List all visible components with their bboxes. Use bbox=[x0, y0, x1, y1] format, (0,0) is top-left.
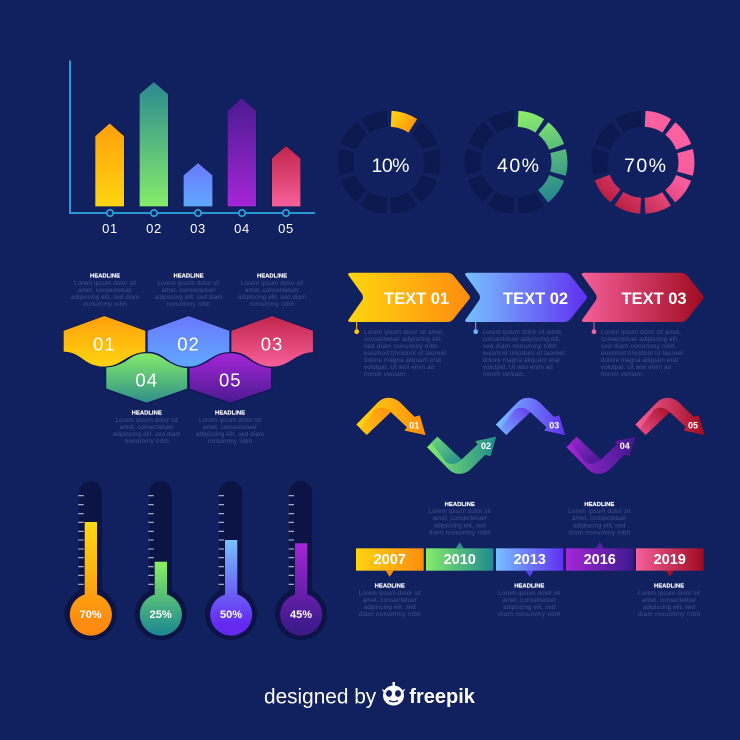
hexagon text: 04: HEADLINE bbox=[132, 410, 162, 416]
donut chart: 40% bbox=[472, 119, 560, 206]
timeline bbox=[356, 502, 704, 618]
bar 04 bbox=[227, 98, 256, 207]
hexagon text: 02: Lorem ipsum dolor sit bbox=[158, 280, 220, 287]
thermometer: 45% bbox=[275, 481, 327, 640]
hexagon text: 02: HEADLINE bbox=[173, 273, 204, 279]
chevron banner: text 02: minim veniam, bbox=[483, 371, 526, 378]
hexagon 04: 04 bbox=[135, 369, 158, 390]
bar 02 bbox=[139, 82, 168, 207]
footer credit bbox=[264, 682, 476, 708]
timeline note: above 2010: diam nonummy nibh bbox=[429, 529, 491, 536]
arrow 02 bbox=[427, 436, 497, 474]
hexagon text: 03: HEADLINE bbox=[257, 273, 287, 279]
timeline note: below 2013 bbox=[498, 583, 561, 618]
chevron banner: text 02: consectetuer adipiscing elit, bbox=[483, 336, 561, 343]
hexagon text: 02: nonummy nibh bbox=[166, 301, 211, 308]
timeline note: below 2019: adipiscing elit, sed bbox=[643, 604, 696, 611]
timeline note: below 2013: HEADLINE bbox=[514, 583, 544, 589]
hexagon text: 05: adipiscing elit, sed diam bbox=[196, 431, 264, 438]
hexagon text: 01: HEADLINE bbox=[90, 273, 120, 279]
footer credit: designed by bbox=[264, 685, 377, 708]
hexagon text: 02 bbox=[154, 273, 222, 308]
timeline note: above 2016: HEADLINE bbox=[584, 502, 614, 508]
timeline note: below 2007: adipiscing elit, sed bbox=[364, 604, 416, 611]
hexagon 04 bbox=[106, 353, 188, 403]
chevron banner: text 01 bbox=[348, 273, 470, 378]
timeline note: above 2016: diam nonummy nibh bbox=[568, 529, 631, 536]
hexagon text: 04: adipiscing elit, sed diam bbox=[113, 431, 181, 438]
chevron banner: text 03: Lorem ipsum dolor sit amet, bbox=[601, 329, 681, 336]
chevron banner: text 03: dolore magna aliquam erat bbox=[601, 357, 678, 364]
hexagon 02 bbox=[147, 316, 230, 367]
chevron banner: text 03: minim veniam, bbox=[601, 371, 644, 378]
wave arrows bbox=[356, 398, 705, 474]
hexagon text: 05 bbox=[196, 410, 264, 445]
chevron banner: text 03: TEXT 03 bbox=[622, 290, 687, 308]
chevron banner: text 01: sed diam nonummy nibh bbox=[364, 343, 438, 350]
chevron banner: text 01: minim veniam, bbox=[364, 371, 407, 378]
hexagon text: 02: amet, consectetuer bbox=[162, 287, 216, 294]
donut chart: 70%: 70% bbox=[624, 155, 666, 177]
chevron banner: text 02: TEXT 02 bbox=[503, 290, 568, 308]
hexagon 03: 03 bbox=[261, 334, 283, 355]
timeline block: 2007 bbox=[356, 548, 424, 577]
hexagon text: 01: nonummy nibh bbox=[83, 301, 128, 308]
timeline note: below 2013: diam nonummy nibh bbox=[498, 611, 561, 618]
timeline note: above 2016: Lorem ipsum dolor sit bbox=[568, 508, 631, 515]
timeline note: above 2010: HEADLINE bbox=[445, 502, 475, 508]
timeline block: 2019: 2019 bbox=[654, 552, 686, 568]
hexagon 01: 01 bbox=[93, 334, 116, 355]
hexagon text: 01: adipiscing elit, sed diam bbox=[71, 294, 139, 301]
timeline block: 2007: 2007 bbox=[374, 552, 406, 568]
chevron banner: text 03: volutpat. Ut wisi enim ad bbox=[601, 364, 672, 371]
axis labels: 01 bbox=[102, 221, 118, 236]
arrow 01: 01 bbox=[409, 420, 419, 430]
arrow 04 bbox=[566, 436, 636, 474]
timeline block: 2013 bbox=[496, 548, 563, 577]
bar 05 bbox=[272, 146, 301, 207]
donut chart: 70% bbox=[600, 119, 686, 206]
timeline block: 2016: 2016 bbox=[584, 552, 616, 568]
axis labels bbox=[102, 221, 294, 236]
axis labels: 03 bbox=[190, 221, 206, 236]
timeline note: below 2007: amet, consectetuer bbox=[363, 597, 417, 604]
hexagon text: 05: amet, consectetuer bbox=[203, 424, 257, 431]
chevron banner: text 03: sed diam nonummy nibh bbox=[601, 343, 675, 350]
thermometer: 50%: 50% bbox=[220, 609, 242, 621]
timeline note: below 2007: Lorem ipsum dolor sit bbox=[359, 590, 421, 597]
hexagon text: 01: amet, consectetuer bbox=[78, 287, 132, 294]
hexagon text: 03: nonummy nibh bbox=[250, 301, 295, 308]
hexagon text: 04: nonummy nibh bbox=[125, 438, 169, 445]
bar chart bbox=[70, 60, 315, 236]
timeline note: below 2013: amet, consectetuer bbox=[502, 597, 556, 604]
axis labels: 05 bbox=[278, 221, 294, 236]
icon: freepik mascot bbox=[382, 682, 405, 706]
chart axes bbox=[70, 60, 315, 213]
timeline note: below 2019: HEADLINE bbox=[654, 583, 684, 589]
timeline note: below 2019: diam nonummy nibh bbox=[638, 611, 701, 618]
hexagon infographic bbox=[63, 273, 313, 445]
chevron banner: text 01: euismod tincidunt ut laoreet bbox=[364, 350, 446, 357]
donut chart: 10% bbox=[346, 119, 432, 206]
axis labels: 04 bbox=[234, 221, 250, 236]
arrow 03 bbox=[496, 398, 566, 436]
chevron banner: text 01: TEXT 01 bbox=[384, 290, 449, 308]
timeline block: 2010 bbox=[426, 542, 493, 571]
hexagon 05: 05 bbox=[219, 369, 242, 390]
thermometer: 45%: 45% bbox=[290, 609, 312, 621]
timeline note: above 2010 bbox=[429, 502, 491, 536]
timeline block: 2013: 2013 bbox=[514, 552, 546, 568]
bar 01 bbox=[95, 123, 124, 207]
chevron banner: text 02: dolore magna aliquam erat bbox=[483, 357, 560, 364]
arrow 01 bbox=[356, 398, 426, 436]
hexagon 02: 02 bbox=[177, 334, 200, 355]
timeline note: above 2010: Lorem ipsum dolor sit bbox=[429, 508, 491, 515]
chevron banner: text 01: volutpat. Ut wisi enim ad bbox=[364, 364, 435, 371]
donut chart: 40%: 40% bbox=[497, 155, 539, 177]
timeline note: below 2019 bbox=[638, 583, 701, 618]
timeline block: 2019 bbox=[636, 548, 704, 577]
thermometer: 70% bbox=[65, 481, 117, 640]
chevron banner: text 02: sed diam nonummy nibh bbox=[483, 343, 557, 350]
hexagon text: 01: Lorem ipsum dolor sit bbox=[74, 280, 136, 287]
thermometer: 25% bbox=[135, 481, 187, 640]
hexagon text: 05: Lorem ipsum dolor sit bbox=[199, 417, 261, 424]
chevron banner: text 03: consectetuer adipiscing elit, bbox=[601, 336, 679, 343]
timeline note: below 2007: diam nonummy nibh bbox=[359, 611, 421, 618]
timeline block: 2010: 2010 bbox=[444, 552, 476, 568]
thermometer: 25%: 25% bbox=[150, 609, 172, 621]
donut chart: 10%: 10% bbox=[372, 155, 410, 177]
arrow 02: 02 bbox=[481, 441, 491, 451]
chevron banner: text 01: dolore magna aliquam erat bbox=[364, 357, 441, 364]
timeline note: below 2013: Lorem ipsum dolor sit bbox=[498, 590, 561, 597]
timeline block: 2016 bbox=[566, 542, 633, 571]
hexagon 01 bbox=[63, 316, 146, 367]
footer credit: freepik bbox=[409, 686, 476, 708]
chevron banner: text 02: Lorem ipsum dolor sit amet, bbox=[483, 329, 563, 336]
thermometer: 50% bbox=[205, 481, 257, 640]
hexagon text: 04: amet, consectetuer bbox=[120, 424, 174, 431]
timeline note: above 2016: adipiscing elit, sed bbox=[573, 522, 626, 529]
hexagon text: 02: adipiscing elit, sed diam bbox=[154, 294, 222, 301]
hexagon text: 01 bbox=[71, 273, 139, 308]
hexagon text: 03: adipiscing elit, sed diam bbox=[238, 294, 306, 301]
axis markers bbox=[107, 210, 289, 216]
hexagon text: 03 bbox=[238, 273, 306, 308]
chevron banner: text 02 bbox=[465, 273, 587, 378]
timeline note: above 2016 bbox=[568, 502, 631, 536]
timeline note: below 2019: Lorem ipsum dolor sit bbox=[638, 590, 700, 597]
hexagon text: 05: nonummy nibh bbox=[208, 438, 253, 445]
chevron banner: text 01: consectetuer adipiscing elit, bbox=[364, 336, 442, 343]
hexagon 05 bbox=[189, 353, 272, 403]
axis labels: 02 bbox=[146, 221, 162, 236]
hexagon text: 04: Lorem ipsum dolor sit bbox=[116, 417, 178, 424]
timeline note: above 2010: adipiscing elit, sed bbox=[434, 522, 486, 529]
chevron banner: text 02: euismod tincidunt ut laoreet bbox=[483, 350, 565, 357]
timeline note: below 2013: adipiscing elit, sed bbox=[503, 604, 556, 611]
chevron banner: text 03: euismod tincidunt ut laoreet bbox=[601, 350, 683, 357]
chevron banner: text 03 bbox=[582, 273, 704, 378]
timeline note: below 2007 bbox=[359, 583, 421, 618]
hexagon text: 04 bbox=[113, 410, 181, 445]
chevron banner: text 01: Lorem ipsum dolor sit amet, bbox=[364, 329, 444, 336]
hexagon text: 03: Lorem ipsum dolor sit bbox=[241, 280, 303, 287]
chevron banner: text 02: volutpat. Ut wisi enim ad bbox=[483, 364, 553, 371]
bar 03 bbox=[183, 163, 213, 207]
hexagon text: 03: amet, consectetuer bbox=[245, 287, 299, 294]
hexagon 03 bbox=[231, 316, 313, 367]
thermometer: 70%: 70% bbox=[80, 609, 102, 621]
arrow 04: 04 bbox=[620, 441, 630, 451]
hexagon text: 05: HEADLINE bbox=[215, 410, 245, 416]
arrow 03: 03 bbox=[549, 420, 559, 430]
timeline note: below 2019: amet, consectetuer bbox=[642, 597, 696, 604]
arrow 05: 05 bbox=[688, 420, 698, 430]
timeline note: above 2010: amet, consectetuer bbox=[433, 515, 487, 522]
timeline note: below 2007: HEADLINE bbox=[375, 583, 405, 589]
timeline note: above 2016: amet, consectetuer bbox=[572, 515, 626, 522]
arrow 05 bbox=[635, 398, 705, 436]
